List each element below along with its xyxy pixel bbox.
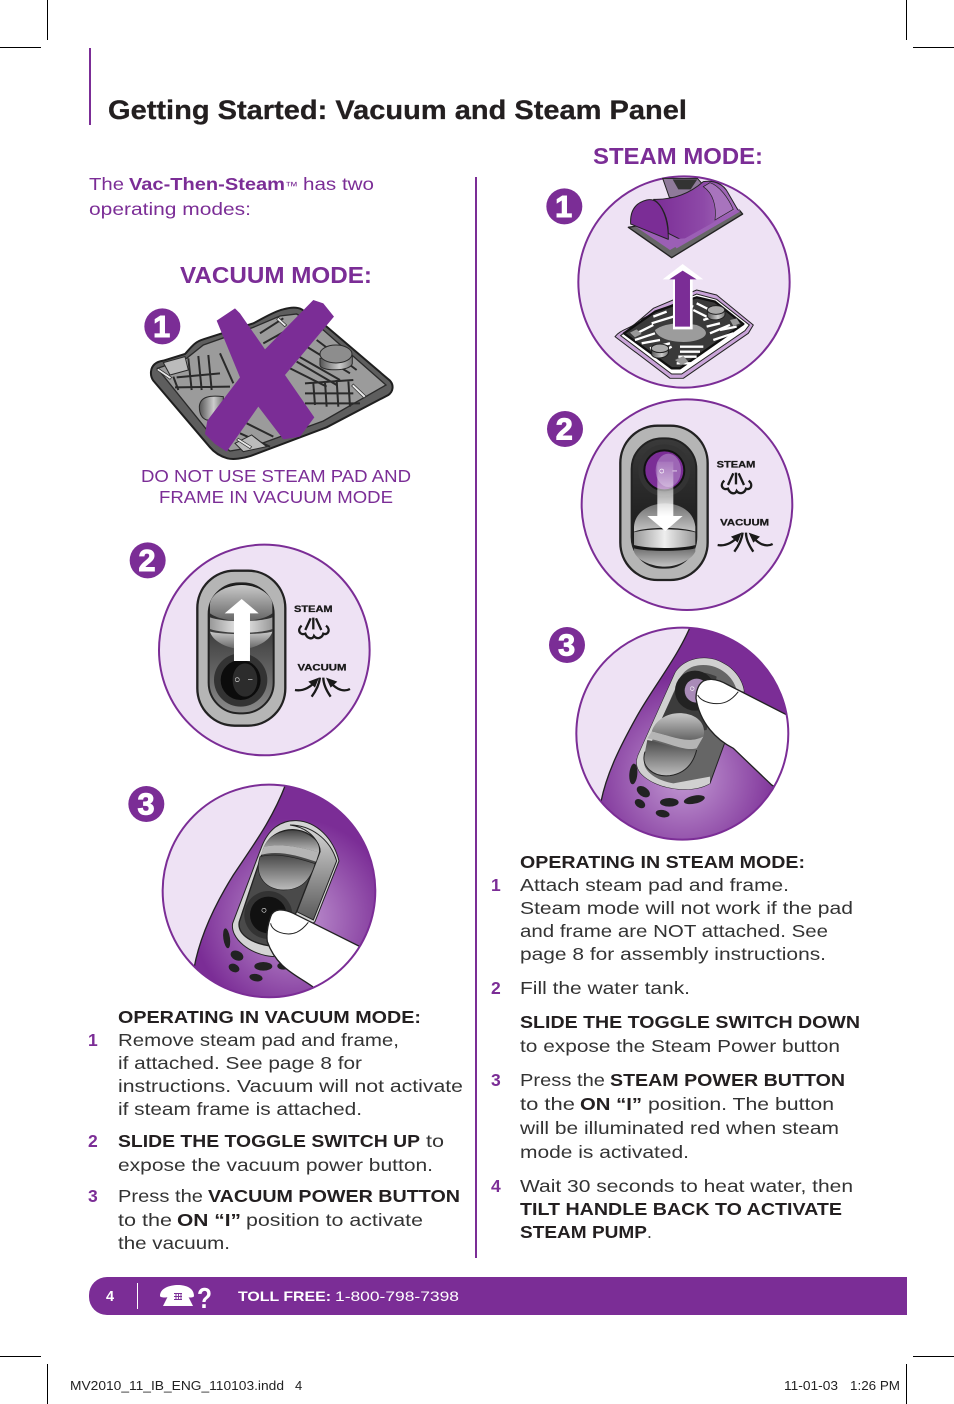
purple X <box>205 300 334 452</box>
heading: vacuum mode: VACUUM MODE: <box>180 262 372 288</box>
operating in vacuum mode instructions: SLIDE THE TOGGLE SWITCH UP <box>118 1131 420 1151</box>
operating in vacuum mode instructions: ON “I” <box>177 1210 241 1230</box>
toggle panel <box>620 426 708 580</box>
icon: step badge 3: 3 <box>558 629 575 663</box>
operating in vacuum mode instructions: 2 <box>88 1131 98 1151</box>
intro text: Vac-Then-Steam <box>129 174 285 194</box>
icon: steam <box>294 604 333 638</box>
steam pad and frame <box>615 290 753 378</box>
operating in vacuum mode instructions <box>88 1007 463 1253</box>
operating in steam mode instructions: to the <box>520 1094 575 1114</box>
operating in vacuum mode instructions: Remove steam pad and frame, <box>118 1030 399 1050</box>
illustration: vacuum step 1 steam pad crossed out <box>144 300 393 459</box>
operating in vacuum mode instructions: the vacuum. <box>118 1233 230 1253</box>
icon: step badge 1 <box>546 188 582 224</box>
footer bar: 1-800-798-7398 <box>335 1288 459 1304</box>
icon: vacuum <box>295 663 350 697</box>
icon: step badge 3: 3 <box>137 788 155 822</box>
illustration: steam step 2 toggle switch down <box>547 399 792 610</box>
print slug left: 4 <box>295 1378 302 1393</box>
icon: vacuum: VACUUM <box>720 518 769 528</box>
column divider <box>475 177 477 1258</box>
heading: steam mode: STEAM MODE: <box>593 143 763 169</box>
operating in steam mode instructions: and frame are NOT attached. See <box>520 921 828 941</box>
finger <box>695 678 788 786</box>
print slug right: 1:26 PM <box>850 1378 900 1393</box>
toggle panel: O <box>234 677 241 682</box>
icon: telephone help: ? <box>197 1283 212 1315</box>
header accent rule <box>89 48 91 125</box>
operating in vacuum mode instructions: instructions. Vacuum will not activate <box>118 1076 463 1096</box>
operating in steam mode instructions: Attach steam pad and frame. <box>520 875 789 895</box>
toggle panel: O <box>659 468 666 474</box>
arrow up <box>225 599 259 661</box>
illustration: vacuum step 3 press button <box>128 782 387 1008</box>
arrow down <box>647 462 683 531</box>
operating in steam mode instructions: STEAM POWER BUTTON <box>610 1070 845 1090</box>
icon: step badge 1 <box>144 308 180 344</box>
steam pad <box>151 308 393 459</box>
operating in steam mode instructions: STEAM PUMP <box>520 1222 647 1242</box>
operating in steam mode instructions: will be illuminated red when steam <box>519 1118 839 1138</box>
toll free number: TOLL FREE: <box>238 1288 331 1304</box>
operating in vacuum mode instructions: to the <box>118 1210 172 1230</box>
operating in steam mode instructions: Wait 30 seconds to heat water, then <box>520 1176 853 1196</box>
vents <box>222 928 289 982</box>
warning caption: DO NOT USE STEAM PAD AND <box>141 466 411 486</box>
operating in steam mode instructions: to expose the Steam Power button <box>520 1036 840 1056</box>
footer bar <box>89 1277 907 1315</box>
warning caption <box>141 466 411 507</box>
operating in vacuum mode instructions: if steam frame is attached. <box>118 1099 362 1119</box>
operating in steam mode instructions: 3 <box>491 1070 501 1090</box>
operating in vacuum mode instructions: expose the vacuum power button. <box>118 1155 433 1175</box>
icon: step badge 3 <box>128 786 164 822</box>
operating in steam mode instructions: OPERATING IN STEAM MODE: <box>520 852 805 872</box>
vents <box>628 763 706 818</box>
operating in vacuum mode instructions: 3 <box>88 1186 98 1206</box>
intro text: has two <box>303 174 374 194</box>
operating in vacuum mode instructions: OPERATING IN VACUUM MODE: <box>118 1007 421 1027</box>
control panel <box>232 821 339 957</box>
print slug left: MV2010_11_IB_ENG_110103.indd <box>70 1378 284 1393</box>
illustration: vacuum step 3 press button: O <box>261 907 269 914</box>
intro text: ™ <box>285 179 298 193</box>
icon: steam: STEAM <box>294 604 333 614</box>
toggle panel: I <box>672 470 679 472</box>
intro text: operating modes: <box>89 199 251 219</box>
control panel <box>637 658 744 789</box>
icon: steam <box>717 459 755 493</box>
operating in vacuum mode instructions: 1 <box>88 1030 98 1050</box>
icon: steam: STEAM <box>717 459 755 469</box>
illustration: steam step 1 attach pad <box>546 176 790 388</box>
illustration: steam step 3 press button <box>549 626 790 841</box>
finger <box>266 910 359 988</box>
icon: step badge 1: 1 <box>555 190 572 224</box>
illustration: vacuum step 2 toggle switch up <box>130 542 370 755</box>
arrow up <box>663 264 703 329</box>
toggle panel <box>197 571 285 726</box>
operating in steam mode instructions: . <box>647 1222 652 1242</box>
title: Getting Started: Vacuum and Steam Panel <box>108 95 687 125</box>
operating in vacuum mode instructions: VACUUM POWER BUTTON <box>208 1186 460 1206</box>
icon: step badge 2: 2 <box>556 413 573 447</box>
operating in vacuum mode instructions: position to activate <box>246 1210 423 1230</box>
operating in steam mode instructions: Steam mode will not work if the pad <box>520 898 853 918</box>
intro text: The <box>89 174 124 194</box>
operating in vacuum mode instructions: if attached. See page 8 for <box>118 1053 362 1073</box>
operating in steam mode instructions: position. The button <box>648 1094 834 1114</box>
icon: vacuum <box>718 518 773 552</box>
toggle panel: I <box>247 679 254 681</box>
intro text <box>89 174 374 219</box>
operating in steam mode instructions: 2 <box>491 978 501 998</box>
operating in vacuum mode instructions: to <box>426 1131 444 1151</box>
icon: vacuum: VACUUM <box>297 663 346 673</box>
print slug right <box>784 1378 900 1393</box>
operating in steam mode instructions: 1 <box>491 875 501 895</box>
illustration: steam step 3 press button: O <box>690 685 697 692</box>
icon: step badge 2 <box>547 411 583 447</box>
steam nozzle <box>628 178 743 258</box>
icon: telephone help <box>160 1283 212 1315</box>
warning caption: FRAME IN VACUUM MODE <box>159 487 393 507</box>
operating in vacuum mode instructions: Press the <box>118 1186 203 1206</box>
print slug right: 11-01-03 <box>784 1378 838 1393</box>
icon: step badge 3 <box>549 627 585 663</box>
operating in steam mode instructions: TILT HANDLE BACK TO ACTIVATE <box>520 1199 842 1219</box>
operating in steam mode instructions: 4 <box>491 1176 501 1196</box>
operating in steam mode instructions: Press the <box>520 1070 605 1090</box>
operating in steam mode instructions: ON “I” <box>580 1094 642 1114</box>
icon: step badge 2 <box>130 542 166 578</box>
operating in steam mode instructions: mode is activated. <box>520 1142 689 1162</box>
operating in steam mode instructions: SLIDE THE TOGGLE SWITCH DOWN <box>520 1012 860 1032</box>
operating in steam mode instructions: Fill the water tank. <box>520 978 690 998</box>
icon: step badge 1: 1 <box>153 310 170 344</box>
page number: 4 <box>106 1289 114 1305</box>
operating in steam mode instructions <box>491 852 860 1242</box>
icon: step badge 2: 2 <box>138 544 156 578</box>
operating in steam mode instructions: page 8 for assembly instructions. <box>520 944 826 964</box>
